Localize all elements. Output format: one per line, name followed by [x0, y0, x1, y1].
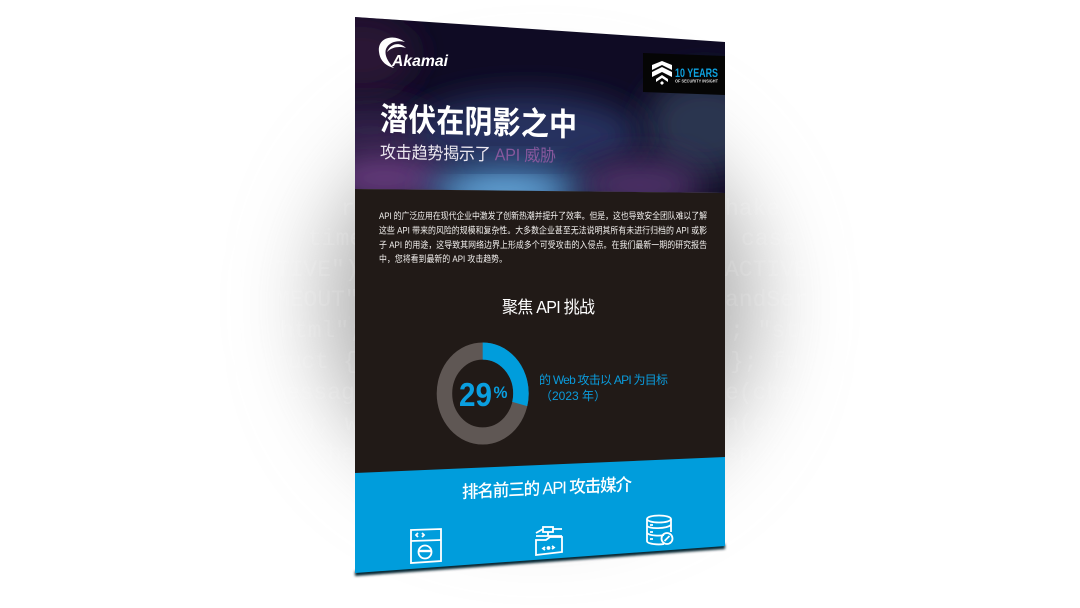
background code text: sp(Cha: [725, 441, 808, 467]
background code text: ACTIVE: [725, 257, 808, 283]
background code text: truct {: [260, 349, 357, 375]
heading: API challenge: 聚焦 API 挑战: [502, 297, 595, 317]
background code text: IMEOUT": [262, 287, 359, 313]
logo: Akamai: Akamai: [391, 53, 449, 70]
background code text: time: [308, 226, 363, 252]
background code text: e(chan: [725, 380, 808, 406]
background code text: case: [741, 226, 796, 252]
stat label: [539, 372, 668, 403]
title: 潜伏在阴影之中: [380, 102, 577, 143]
background code text: hake: [725, 196, 780, 222]
intro paragraph: [379, 209, 707, 264]
stat label: （2023 年）: [540, 389, 606, 403]
background code text: CTIVE"): [262, 257, 359, 283]
icon: folder with code: [536, 527, 562, 555]
intro paragraph: 这些 API 带来的风险的规模和复杂性。大多数企业甚至无法说明其所有未进行归档的 API 或影: [379, 224, 707, 236]
page bottom shadow: [355, 544, 725, 576]
stat: 29%: 29: [459, 376, 492, 413]
icon: database with settings badge: [647, 516, 672, 544]
background code text: n(conn: [725, 411, 808, 437]
background code text: html";: [280, 318, 363, 344]
intro paragraph: 中，您将看到最新的 API 攻击趋势。: [379, 252, 507, 264]
icon: browser window with face: [411, 529, 441, 563]
badge: 10 years of security insight: 10 YEARS: [675, 66, 718, 80]
panel: blue section: [355, 457, 725, 573]
donut chart: 29%: [444, 351, 521, 436]
background code text: }; fun: [730, 349, 813, 375]
backdrop shadow glow: [325, 110, 755, 500]
logo: Akamai: [379, 37, 449, 70]
background code text: .Cha: [300, 441, 355, 467]
badge: 10 years of security insight: OF SECURITY INSIGHT: [675, 78, 718, 84]
stat label: 的 Web 攻击以 API 为目标: [539, 372, 668, 387]
intro paragraph: API 的广泛应用在现代企业中激发了创新热潮并提升了效率。但是，这也导致安全团队难以了解: [379, 209, 707, 221]
background code text: sed); w: [262, 411, 359, 437]
panel: header image: [355, 17, 725, 193]
background code text: andServ: [725, 287, 822, 313]
background code text: [260, 196, 827, 467]
subtitle: 攻击趋势揭示了 API 威胁: [380, 142, 556, 166]
badge: 10 years of security insight: [643, 53, 725, 95]
background code text: Messag: [272, 380, 355, 406]
background code text: ; "stri: [730, 318, 827, 344]
intro paragraph: 子 API 的用途，这导致其网络边界上形成多个可受攻击的入侵点。在我们最新一期的研究报告: [379, 238, 707, 250]
heading: top three attack vectors: 排名前三的 API 攻击媒介: [462, 475, 632, 502]
panel: dark body: [355, 189, 725, 474]
background code text: r: [341, 196, 355, 222]
stat: 29%: %: [494, 383, 508, 402]
